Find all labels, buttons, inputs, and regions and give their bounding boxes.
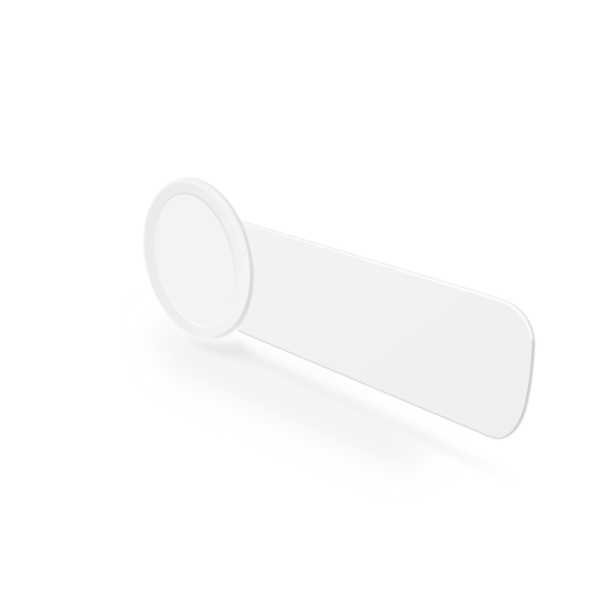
panel edge (238, 220, 535, 439)
disc back rim (133, 166, 269, 350)
panel top highlight (238, 220, 533, 345)
round disc (128, 166, 269, 350)
disc front ring (128, 172, 260, 348)
shadow: soft wide cast (150, 320, 440, 470)
ring inner shading (140, 184, 250, 336)
disc face (143, 186, 247, 334)
panel face (238, 222, 532, 438)
ground shadow (150, 320, 520, 486)
disc rim top light (130, 167, 266, 347)
shadow: disc contact (185, 335, 262, 362)
shadow: panel streak (246, 352, 520, 486)
tag panel (238, 220, 535, 439)
